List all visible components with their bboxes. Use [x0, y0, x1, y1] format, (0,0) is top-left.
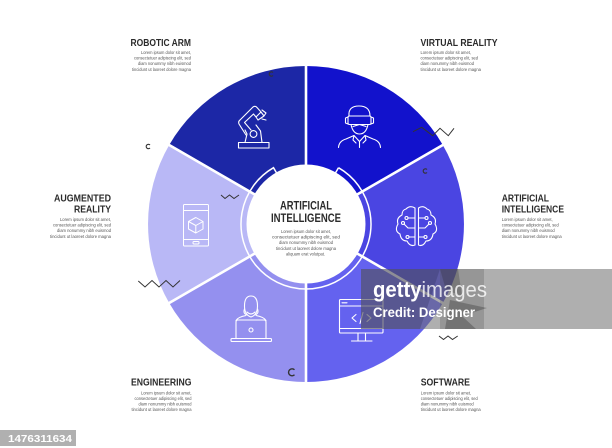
decoration: small zigzag on augmented reality	[221, 195, 239, 198]
icon: virtual reality headset person	[338, 106, 380, 148]
watermark credit: Credit: Designer	[373, 304, 476, 320]
text block: robotic arm: tincidunt ut laoreet dolore magna	[132, 67, 191, 72]
text block: robotic arm: ROBOTIC ARM	[130, 37, 191, 49]
center circle	[246, 164, 366, 284]
center text: tincidunt ut laoreet dolore magna	[276, 246, 336, 251]
icon: software monitor with code	[340, 300, 383, 341]
decoration: small arc left	[146, 144, 150, 149]
icon: engineer with laptop	[231, 296, 272, 342]
text block: virtual reality: VIRTUAL REALITY	[420, 37, 498, 49]
text block: artificial intelligence: diam nonummy nibh euismod	[502, 228, 555, 233]
text block: virtual reality: tincidunt ut laoreet dolore magna	[420, 67, 481, 72]
center text: consectetuer adipiscing elit, sed	[272, 235, 340, 240]
segment: artificial intelligence	[306, 145, 464, 303]
center text: INTELLIGENCE	[271, 213, 341, 225]
text block: augmented reality: diam nonummy nibh euismod	[57, 228, 111, 233]
text block: augmented reality: consectetuer adipiscing elit, sed	[53, 223, 111, 228]
segment: robotic arm	[169, 66, 306, 224]
text block: artificial intelligence: Lorem ipsum dolor sit amet,	[502, 217, 553, 222]
text block: engineering: consectetuer adipiscing elit, sed	[134, 396, 192, 401]
image id tag	[0, 430, 76, 446]
text block: virtual reality: consectetuer adipiscing elit, sed	[420, 56, 478, 61]
text block: engineering	[131, 377, 192, 412]
text block: artificial intelligence	[502, 193, 564, 239]
text block: robotic arm	[130, 37, 191, 72]
decoration: small arc right	[423, 169, 427, 173]
segment: software	[306, 224, 443, 382]
text block: software: diam nonummy nibh euismod	[421, 402, 474, 406]
text block: software	[421, 377, 481, 412]
decoration: large zigzag left	[138, 280, 180, 287]
segment dividers	[167, 64, 445, 384]
center text: diam nonummy nibh euismod	[279, 240, 333, 245]
text block: engineering: ENGINEERING	[131, 377, 192, 389]
segment: virtual reality	[306, 66, 443, 224]
text block: virtual reality: diam nonummy nibh euismod	[420, 61, 474, 66]
image id tag: 1476311634	[8, 433, 72, 445]
icon: brain	[396, 207, 437, 246]
text block: robotic arm: Lorem ipsum dolor sit amet,	[141, 50, 191, 55]
center ring	[241, 168, 371, 289]
decoration: small arc top	[269, 72, 273, 76]
text block: artificial intelligence: consectetuer adipiscing elit, sed	[502, 223, 559, 228]
text block: software: Lorem ipsum dolor sit amet,	[421, 390, 471, 395]
text block: virtual reality: Lorem ipsum dolor sit amet,	[420, 50, 471, 55]
text block: robotic arm: diam nonummy nibh euismod	[138, 61, 191, 66]
text block: engineering: diam nonummy nibh euismod	[138, 402, 192, 406]
text block: artificial intelligence: tincidunt ut laoreet dolore magna	[502, 234, 562, 239]
segment: augmented reality	[148, 145, 306, 303]
text block: augmented reality: REALITY	[74, 204, 111, 216]
decoration: arc bottom	[289, 369, 294, 376]
watermark band	[361, 269, 612, 329]
text block: virtual reality	[420, 37, 498, 72]
decoration: small zigzag lower right	[439, 336, 458, 340]
text block: software: SOFTWARE	[421, 377, 470, 389]
watermark logo text: gettyimages	[373, 277, 487, 302]
text block: software: tincidunt ut laoreet dolore magna	[421, 407, 481, 412]
text block: augmented reality: Lorem ipsum dolor sit amet,	[60, 217, 111, 222]
center text: ARTIFICIAL	[280, 200, 332, 212]
text block: engineering: tincidunt ut laoreet dolore magna	[132, 407, 192, 412]
center text	[271, 200, 341, 256]
center text: aliquam erat volutpat.	[286, 251, 325, 256]
panel: circular segmented wheel	[148, 64, 464, 384]
text block: augmented reality	[50, 193, 111, 239]
segment: engineering	[169, 224, 306, 382]
text block: robotic arm: consectetuer adipiscing elit, sed	[134, 56, 191, 61]
center text: Lorem ipsum dolor sit amet,	[281, 229, 331, 234]
decoration: zigzag near virtual reality	[413, 127, 454, 136]
text block: artificial intelligence: ARTIFICIAL	[502, 193, 549, 205]
text block: augmented reality: AUGMENTED	[54, 193, 111, 205]
icon: smartphone with cube	[184, 204, 208, 246]
text block: software: consectetuer adipiscing elit, sed	[421, 396, 478, 401]
text block: artificial intelligence: INTELLIGENCE	[502, 204, 564, 216]
icon: robotic arm	[238, 106, 269, 148]
text block: engineering: Lorem ipsum dolor sit amet,	[141, 390, 192, 395]
text block: augmented reality: tincidunt ut laoreet dolore magna	[50, 234, 111, 239]
